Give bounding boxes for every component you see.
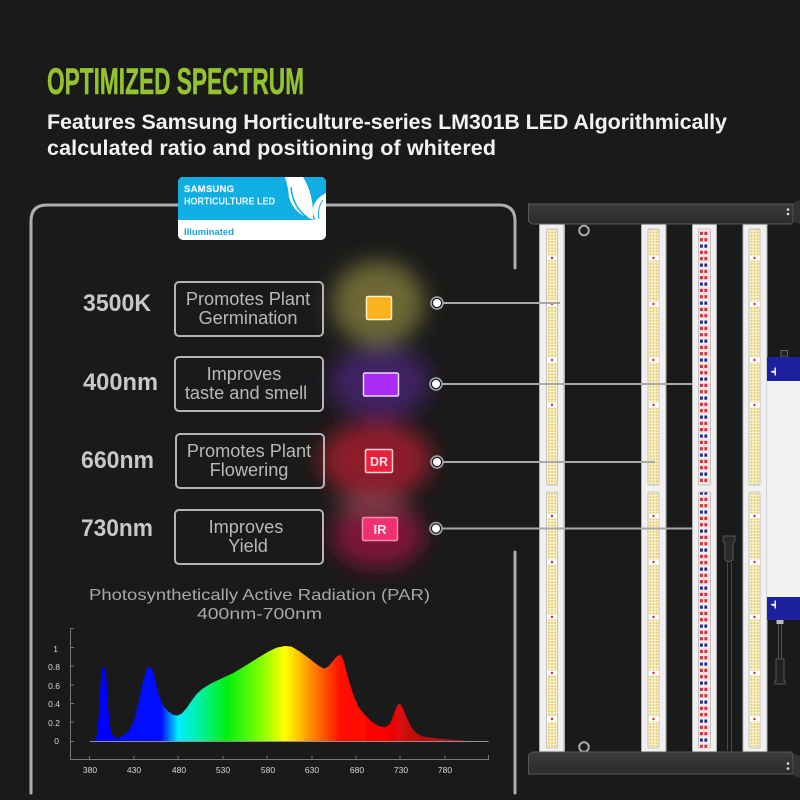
y axis labels: 0.2 [48, 718, 60, 728]
row: 400nm: taste and smell [185, 383, 307, 403]
badge: Samsung Horticulture LED [178, 177, 326, 240]
icon: DR swatch: DR [370, 454, 389, 469]
chart heading: 400nm-700nm [197, 606, 322, 623]
y axis labels: 0 [54, 736, 59, 746]
row: 400nm [83, 357, 442, 411]
x axis labels [83, 765, 452, 775]
row: 3500K: Promotes Plant [186, 289, 310, 309]
x axis labels: 380 [83, 765, 97, 775]
title: OPTIMIZED SPECTRUM [47, 61, 304, 102]
chart axes [70, 628, 488, 760]
icon: leaves [285, 177, 326, 220]
badge: Samsung Horticulture LED: HORTICULTURE LED [184, 196, 275, 208]
x axis labels: 780 [438, 765, 452, 775]
light bar 2 [641, 222, 666, 754]
light bar 4 [742, 222, 768, 754]
row: 660nm: 660nm [81, 447, 154, 474]
chart heading [89, 587, 430, 623]
icon: IR swatch: IR [374, 522, 387, 537]
connector lines [442, 303, 692, 528]
row: 730nm [81, 510, 442, 564]
icon: violet swatch [364, 373, 398, 396]
row: 730nm: 730nm [81, 515, 153, 542]
spectrum curve [90, 646, 489, 741]
subtitle [47, 110, 727, 160]
y axis labels [48, 644, 60, 746]
x axis labels: 430 [127, 765, 141, 775]
subtitle: calculated ratio and positioning of whitered [47, 136, 496, 160]
x axis labels: 480 [172, 765, 186, 775]
chart heading: Photosynthetically Active Radiation (PAR) [89, 587, 430, 604]
marker [431, 297, 443, 309]
glow: colour halos [320, 261, 432, 568]
x axis labels: 730 [394, 765, 408, 775]
marker [431, 456, 443, 468]
y axis labels: 0.6 [48, 681, 60, 691]
row: 3500K: Germination [198, 308, 298, 328]
x axis labels: 530 [216, 765, 230, 775]
icon: DR swatch [366, 450, 392, 472]
x axis labels: 680 [350, 765, 364, 775]
hanging rings [579, 226, 589, 752]
row: 400nm: Improves [207, 364, 281, 384]
bottom rail [528, 752, 800, 778]
marker [430, 378, 442, 390]
x axis labels: 630 [305, 765, 319, 775]
badge: Samsung Horticulture LED: Illuminated [184, 227, 234, 237]
icon: IR swatch [362, 518, 398, 540]
y axis labels: 1 [53, 644, 58, 654]
icon: amber swatch [366, 296, 392, 320]
row: 660nm: Promotes Plant [187, 441, 311, 461]
row: 730nm: Yield [228, 536, 268, 556]
power driver [767, 350, 800, 684]
row: 3500K [83, 282, 443, 336]
y axis labels: 0.4 [48, 699, 60, 709]
light bar 1 [539, 222, 565, 754]
LED fixture [528, 200, 800, 778]
row: 3500K: 3500K [83, 290, 152, 317]
marker [430, 522, 442, 534]
spectrum chart [48, 628, 489, 775]
row: 660nm [81, 434, 443, 488]
top rail [528, 200, 800, 224]
row: 660nm: Flowering [210, 460, 288, 480]
subtitle: Features Samsung Horticulture-series LM301B LED Algorithmically [47, 110, 727, 134]
row: 730nm: Improves [209, 517, 283, 537]
panel: spectrum frame [31, 205, 515, 793]
driver cable [775, 620, 785, 684]
cable [723, 536, 735, 758]
badge: Samsung Horticulture LED: SAMSUNG [184, 184, 234, 195]
row: 400nm: 400nm [83, 369, 158, 396]
y axis labels: 0.8 [48, 662, 60, 672]
x axis labels: 580 [261, 765, 275, 775]
light bar 3: red and blue [692, 222, 717, 754]
